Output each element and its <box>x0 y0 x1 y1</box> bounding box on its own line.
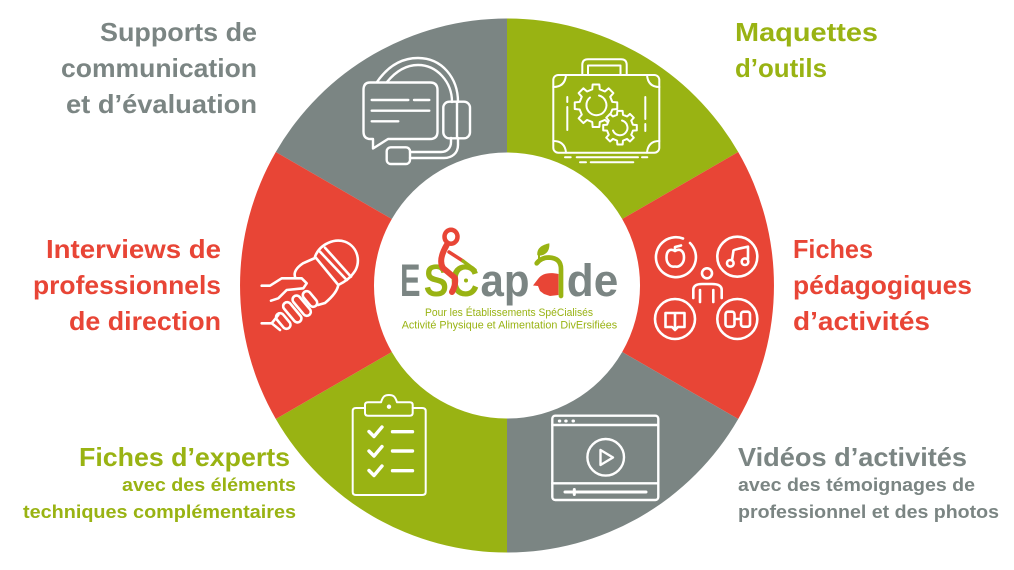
label: maquettes <box>735 17 878 83</box>
icon: person <box>693 268 722 302</box>
label: maquettes: Maquettes <box>735 17 878 47</box>
segment: videos (gray) <box>507 352 738 552</box>
logo letter A with apple and leaf <box>533 243 561 296</box>
logo tagline: Activité Physique et Alimentation DivErsifiées <box>402 320 618 332</box>
label: supports: et d’évaluation <box>66 89 257 119</box>
logo wordmark: ap <box>480 255 530 306</box>
logo wordmark: S <box>424 255 449 306</box>
icon: person surrounded by four activities <box>655 237 757 339</box>
center logo <box>400 230 618 332</box>
icon: dumbbell circle <box>717 299 757 339</box>
icon: clipboard checklist <box>353 395 426 495</box>
icon: music circle <box>717 237 757 277</box>
label: fiches pedagogiques: pédagogiques <box>793 270 972 300</box>
icon: briefcase with gears <box>553 59 659 162</box>
segment: fiches experts (green) <box>276 352 507 552</box>
icon: book circle <box>655 299 695 339</box>
icon: apple circle <box>656 237 696 277</box>
label: interviews <box>33 234 221 336</box>
label: videos: avec des témoignages de <box>738 475 975 495</box>
label: fiches pedagogiques: Fiches <box>793 234 873 264</box>
segment: supports (gray) <box>276 18 507 219</box>
logo wordmark: C <box>450 255 479 306</box>
label: supports <box>61 17 257 119</box>
logo cyclist <box>441 230 475 292</box>
label: videos: Vidéos d’activités <box>738 442 967 472</box>
logo wordmark <box>400 255 618 306</box>
icon: video player <box>552 416 658 500</box>
label: supports: Supports de <box>100 17 257 47</box>
segment: interviews (red) <box>240 152 392 419</box>
label: fiches experts <box>23 442 296 522</box>
label: videos: professionnel et des photos <box>738 502 999 522</box>
label: interviews: Interviews de <box>46 234 221 264</box>
icon: headset with speech bubble <box>364 58 470 164</box>
label: fiches experts: avec des éléments <box>122 475 296 495</box>
logo wordmark: E <box>400 255 420 306</box>
label: videos <box>738 442 999 522</box>
label: fiches experts: Fiches d’experts <box>79 442 290 472</box>
label: fiches experts: techniques complémentaires <box>23 502 296 522</box>
label: interviews: de direction <box>69 306 221 336</box>
label: fiches pedagogiques: d’activités <box>793 306 930 336</box>
label: maquettes: d’outils <box>735 53 827 83</box>
logo wordmark: de <box>567 255 618 306</box>
segment: maquettes (green) <box>507 18 738 219</box>
label: fiches pedagogiques <box>793 234 972 336</box>
logo tagline: Pour les Établissements SpéCialisés <box>425 306 593 319</box>
label: interviews: professionnels <box>33 270 221 300</box>
segment: fiches pedagogiques (red) <box>622 152 774 419</box>
logo tagline <box>402 306 618 332</box>
icon: hand holding microphone <box>262 241 358 330</box>
label: supports: communication <box>61 53 257 83</box>
